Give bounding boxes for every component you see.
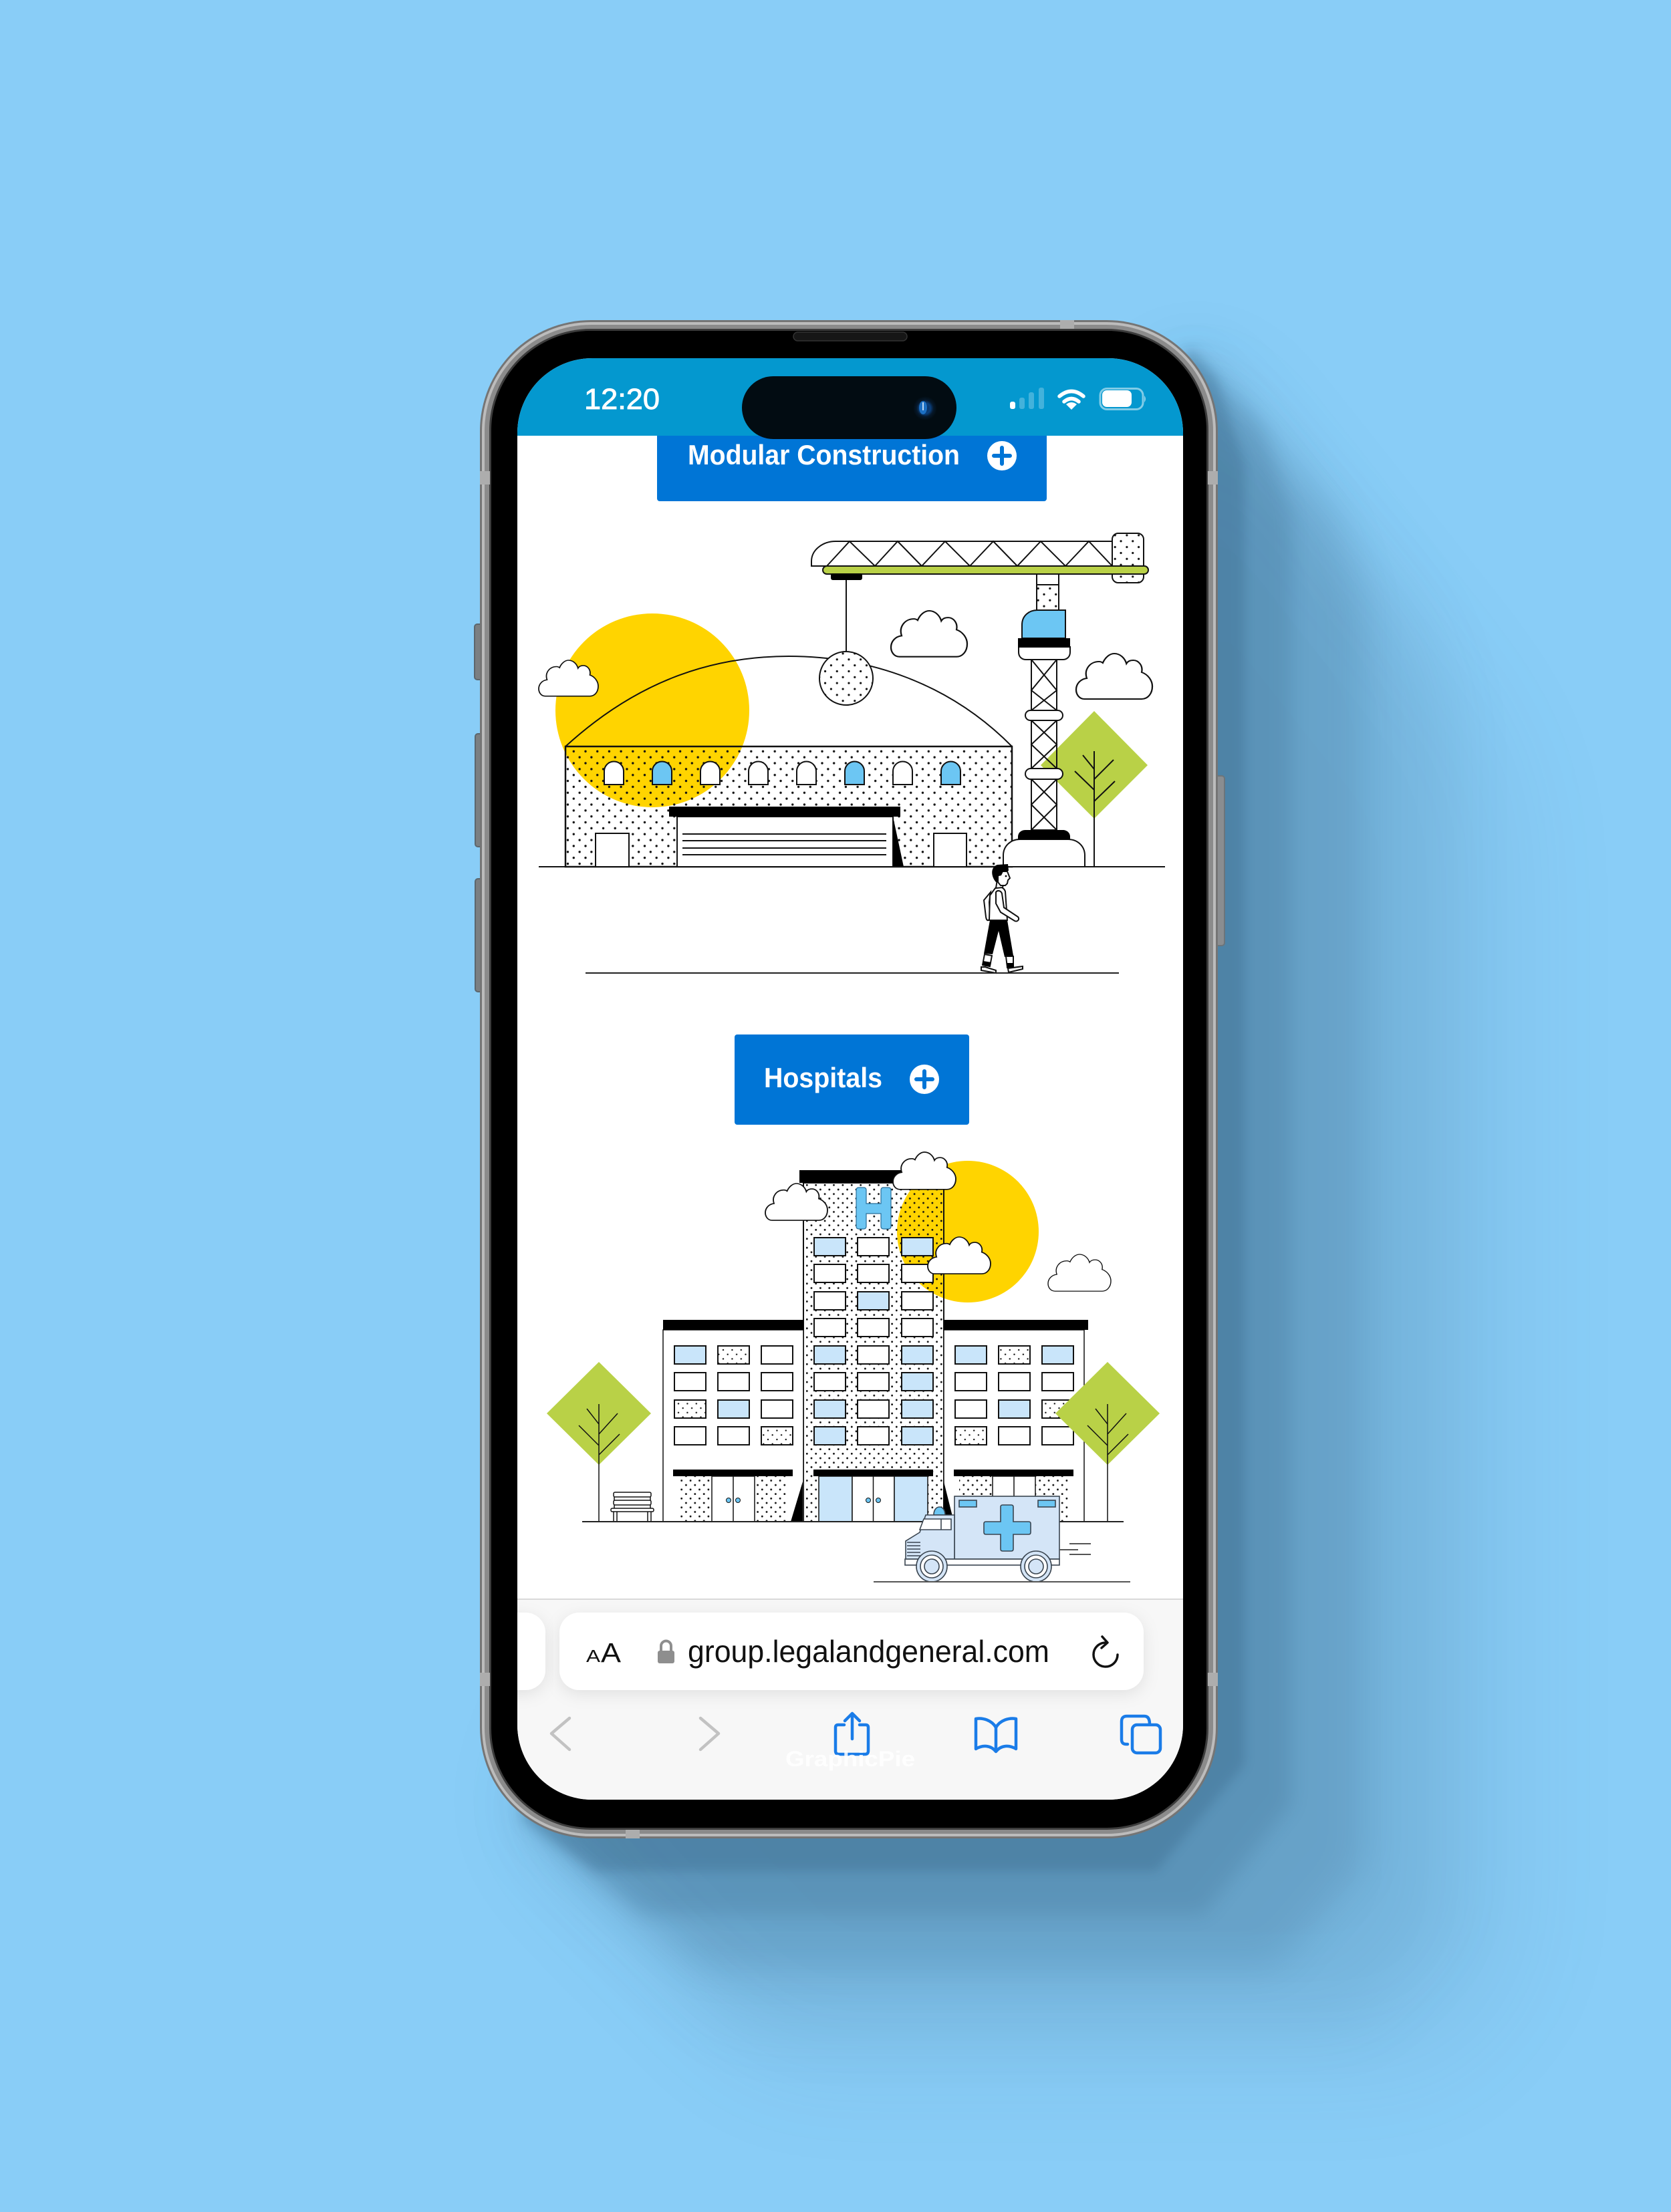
icon: wifi [1059,392,1083,410]
button: Modular Construction [657,436,1047,501]
illustration: hospital [547,1152,1160,1582]
url text: group.legalandgeneral.com [688,1634,1049,1669]
tower entrance [813,1470,933,1522]
left wing [663,1320,803,1522]
clouds [765,1152,1111,1291]
ambulance roof siren [934,1507,945,1515]
ambulance [905,1496,1091,1582]
cross [984,1505,1031,1551]
ambulance cab [906,1515,954,1559]
tree [1041,711,1148,867]
screen [468,358,1183,1800]
building wall [565,746,1012,867]
button label: Modular Construction [688,439,960,470]
speed lines [1059,1544,1091,1554]
entrance wedges [791,1482,954,1522]
camera lens [913,396,937,420]
tower rings [1025,710,1063,779]
chassis band [905,1559,1059,1565]
garage door [669,807,904,867]
cloud left [539,660,598,696]
icon: share [836,1713,868,1754]
screen background [517,358,1183,1800]
icon: lock [658,1641,674,1663]
operator cab [1022,610,1065,638]
ground line [539,866,1165,867]
hospital ground line [582,1521,1124,1522]
tower wall [803,1183,944,1522]
right tree [1055,1362,1160,1522]
crane [811,533,1148,867]
left side buttons [475,624,485,992]
icon: bookmarks [976,1719,1016,1752]
icon: signal [1010,388,1044,409]
icon: battery [1100,389,1146,409]
text size control [586,1637,622,1668]
bench [611,1492,654,1522]
rear wheel [1021,1551,1051,1582]
building dots and outline [565,656,1012,867]
browser toolbar [468,1599,1183,1800]
icon: tabs [1122,1716,1160,1753]
icon: reload [1094,1637,1118,1667]
left tree [547,1362,651,1522]
phone cast shadow [521,348,1519,2072]
watermark: GraphicPie [785,1747,915,1771]
lattice tower [1031,660,1057,830]
address bar [559,1613,1144,1690]
sun [555,613,749,807]
text size control: A [586,1646,601,1666]
speaker [793,332,907,341]
dynamic island [742,376,956,439]
tower dots [803,1183,944,1522]
small doors [596,833,967,867]
grille [907,1542,920,1556]
green beam [823,566,1148,574]
button: Hospitals [735,1034,969,1125]
cloud middle [891,611,967,657]
tower windows [814,1238,933,1445]
time: 12:20 [584,383,660,416]
roof lights [959,1500,1055,1507]
front wheel [916,1551,947,1582]
right wing [944,1320,1088,1522]
right side button [1214,776,1225,946]
ambulance ground line [874,1581,1130,1582]
cab window [920,1519,951,1530]
walking person [981,864,1023,973]
tower roof [799,1170,944,1183]
status bar [517,358,1183,439]
crane jib [811,541,1112,566]
counterweight [1112,533,1144,583]
letter H sign [856,1188,891,1229]
icon: plus [987,441,1017,470]
button label: Hospitals [764,1062,882,1093]
previous tab pill [468,1613,545,1690]
text size control: A [601,1637,622,1668]
crane base [1003,830,1085,867]
cab platform [1018,638,1070,660]
phone device [468,320,1225,1838]
ambulance cargo box [954,1496,1059,1559]
mast top [1037,574,1059,610]
hook and cable [819,573,873,705]
icon: forward [700,1718,719,1750]
illustration: modular construction [539,533,1165,973]
icon: plus [910,1065,939,1094]
cloud right [1076,654,1152,699]
sun [897,1161,1039,1302]
metal frame [480,320,1218,1838]
icon: back [551,1718,569,1750]
arched windows [604,762,960,785]
lower ground line [586,972,1119,974]
